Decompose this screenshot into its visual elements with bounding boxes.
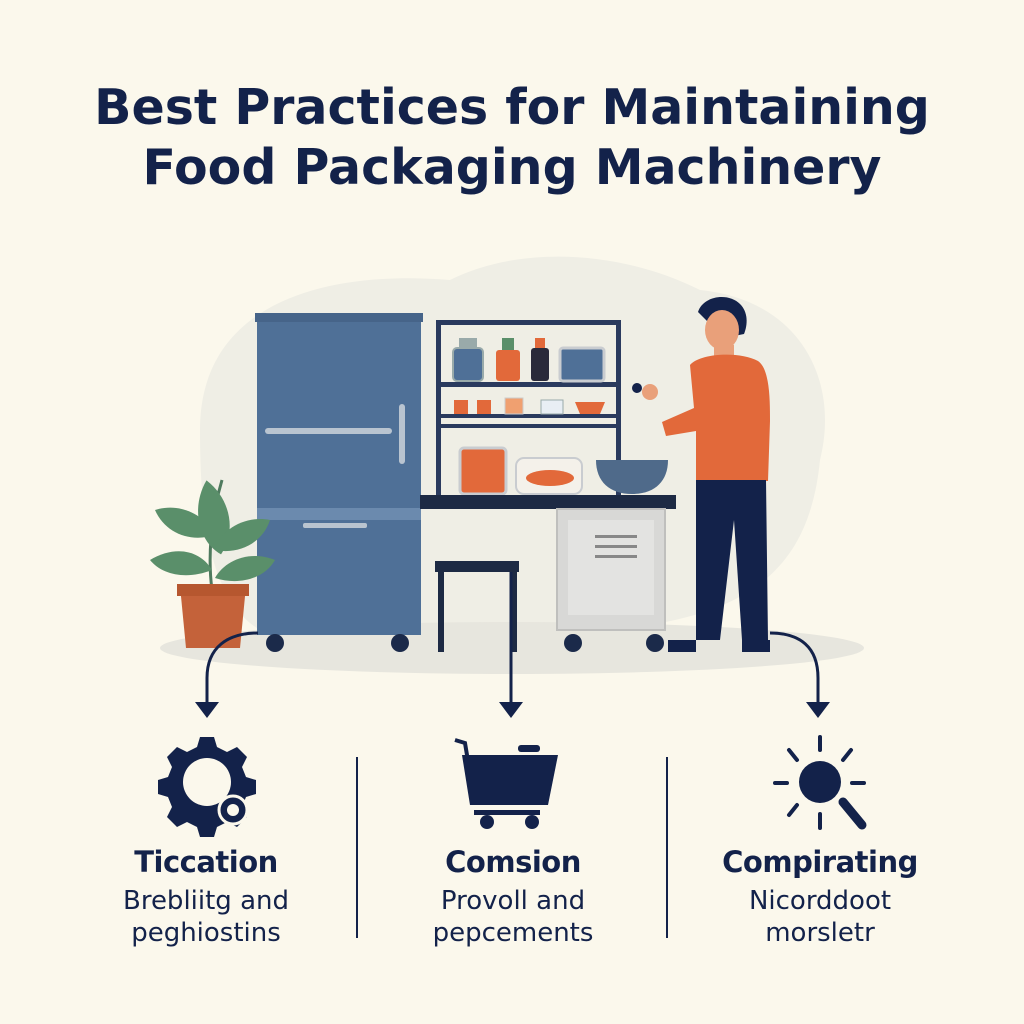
arrow: right — [770, 633, 830, 718]
dividers — [357, 757, 667, 938]
fridge — [255, 313, 423, 652]
column 2 text: Provoll and — [441, 886, 585, 916]
column 1 text: Ticcation — [134, 845, 278, 879]
column 3 text — [722, 845, 918, 948]
title — [94, 79, 930, 196]
plant — [150, 479, 275, 648]
icon: gear — [158, 737, 256, 837]
title: Food Packaging Machinery — [142, 139, 881, 196]
column 2 text: Comsion — [445, 845, 581, 879]
person — [632, 297, 770, 652]
arrow: middle — [499, 572, 523, 718]
column 3 text: Compirating — [722, 845, 918, 879]
icon: cart — [455, 740, 558, 829]
column 3 text: Nicorddoot — [749, 886, 891, 916]
arrow: left — [195, 633, 258, 718]
column 2 text: pepcements — [433, 918, 593, 948]
counter — [420, 495, 676, 652]
column 2 text — [433, 845, 593, 948]
shelf unit — [436, 320, 668, 495]
stool — [435, 561, 519, 652]
column 1 text: peghiostins — [131, 918, 281, 948]
title: Best Practices for Maintaining — [94, 79, 930, 136]
icon: sun magnifier — [775, 737, 864, 828]
column 1 text: Brebliitg and — [123, 886, 289, 916]
column 3 text: morsletr — [765, 918, 875, 948]
column 1 text — [123, 845, 289, 948]
